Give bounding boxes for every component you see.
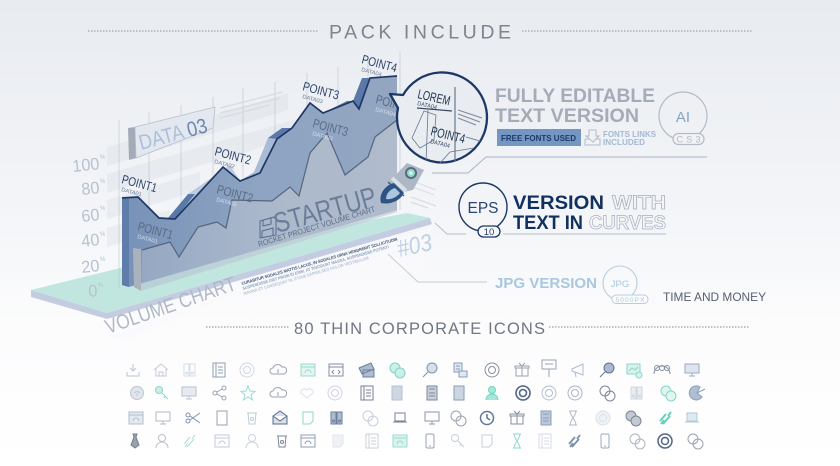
icon: scissors xyxy=(186,413,200,423)
icon: star xyxy=(241,386,255,400)
point labels, main line: DATA02 xyxy=(213,159,235,170)
icon: basket hand xyxy=(486,386,498,400)
icon: pie target xyxy=(689,386,705,400)
magnified chart detail: DATA04 xyxy=(430,139,451,150)
text block: jpg version: JPG VERSION xyxy=(495,276,597,292)
icon grid xyxy=(127,360,705,449)
badge: JPG 5000PX xyxy=(603,266,648,304)
icon: hand gears xyxy=(626,411,641,426)
point labels, main line: POINT4 xyxy=(360,52,399,75)
icon: coffee cup xyxy=(277,436,287,447)
icon: search xyxy=(423,363,437,377)
icon: building xyxy=(454,363,467,377)
startup heading: ROCKET PROJECT VOLUME CHART xyxy=(257,205,376,249)
main data line xyxy=(122,76,397,219)
icon: globe xyxy=(240,363,254,377)
icon: key xyxy=(156,386,168,399)
icon: teal chat xyxy=(661,386,676,401)
text block: fully editable: FULLY EDITABLE xyxy=(495,86,655,107)
icon: server xyxy=(361,386,373,400)
icon: fonts download xyxy=(585,130,600,145)
y axis labels: 40 xyxy=(80,230,100,251)
icon: download xyxy=(127,364,139,376)
icon: dollar xyxy=(568,386,582,400)
lower plane xyxy=(108,226,432,340)
y axis labels: 80 xyxy=(80,178,100,199)
icon: settings xyxy=(688,434,703,449)
side notes xyxy=(411,182,436,208)
point labels, main line: POINT1 xyxy=(120,172,159,195)
left bar xyxy=(122,197,129,287)
y axis labels: 100 xyxy=(71,154,100,176)
icon: smartphone xyxy=(426,434,434,448)
icon: presentation xyxy=(182,387,196,399)
icon: sale xyxy=(542,360,556,377)
front data line xyxy=(142,120,397,257)
icon: phone circle xyxy=(485,363,499,377)
icon: eye xyxy=(596,411,610,425)
badge: free fonts used: FREE FONTS USED xyxy=(501,133,576,143)
badge: EPS 10 xyxy=(459,183,507,238)
icon: code xyxy=(329,364,343,376)
point labels, front line: POINT2 xyxy=(215,182,255,205)
icon: papers xyxy=(333,435,343,447)
startup heading xyxy=(257,181,380,249)
y axis labels: % xyxy=(100,155,106,161)
icon: tablet pie xyxy=(392,386,402,400)
icon: lifebuoy xyxy=(328,386,342,400)
icon: rocket pen xyxy=(660,412,671,424)
fonts links text: INCLUDED xyxy=(603,137,645,147)
point labels, front line: DATA01 xyxy=(136,234,158,245)
icon: bars xyxy=(631,387,642,399)
text block: version with text in curves: WITH xyxy=(612,193,666,214)
icon: monitor xyxy=(685,364,699,376)
magnified chart detail: DATA04 xyxy=(417,101,438,112)
icon: wifi xyxy=(130,386,144,400)
data 03 frame: DATA 03 xyxy=(136,114,210,155)
icon: compass xyxy=(569,411,577,425)
point labels, front line: POINT3 xyxy=(311,116,350,139)
icon: mail xyxy=(273,411,287,424)
heading: thin corporate icons: 80 THIN CORPORATE ICONS xyxy=(294,320,545,338)
icon: chat mobile xyxy=(630,434,645,449)
y axis labels: % xyxy=(98,283,104,289)
icon: note xyxy=(303,412,313,424)
icon: at sign xyxy=(542,386,556,400)
icon: gears xyxy=(390,363,405,378)
icon: contact xyxy=(454,386,464,400)
point labels, main line: DATA04 xyxy=(360,67,382,78)
icon: calculator xyxy=(427,386,437,400)
text block: version with text in curves: VERSION xyxy=(513,193,604,214)
icon: thumbs up xyxy=(516,386,530,400)
icon: printer xyxy=(129,412,143,424)
y axis labels: % xyxy=(100,257,106,263)
connector lines xyxy=(388,157,707,282)
point labels, front line: DATA04 xyxy=(374,107,396,118)
icon: tie user xyxy=(131,434,139,448)
icon: folders xyxy=(331,412,342,424)
icon: gear chain xyxy=(363,411,378,426)
magnified chart detail: POINT4 xyxy=(429,123,467,146)
icon: heart xyxy=(301,389,313,398)
badge: EPS 10: EPS xyxy=(468,200,498,217)
icon: user xyxy=(156,434,168,448)
caption: time and money: TIME AND MONEY xyxy=(663,290,766,304)
startup heading: STARTUP xyxy=(270,181,380,239)
point labels, main line: DATA01 xyxy=(120,187,142,198)
icon: network xyxy=(685,413,699,422)
point labels, main line: POINT3 xyxy=(301,79,341,102)
badge: AI CS3 xyxy=(659,92,707,144)
y axis labels xyxy=(71,154,106,301)
icon: basket xyxy=(184,364,195,376)
magnified chart detail xyxy=(412,86,482,163)
text block: fully editable xyxy=(495,86,656,147)
small paragraph: SUSPENDISSE DIET PROIN ID ERIM, AT TINCIDUNT MAGNA, SUSPENDISSE POTENTI xyxy=(242,244,389,291)
icon: share xyxy=(213,386,226,400)
icon: paperclip xyxy=(184,435,195,447)
icon: wrench xyxy=(452,434,464,447)
point labels, front line: DATA02 xyxy=(215,197,237,208)
badge: EPS 10: 10 xyxy=(484,227,494,238)
small paragraph: MAGNA ET CONSEQUAT IN, ETIAM SAPIEN SED DOLOR VESTIBULUM xyxy=(243,255,370,296)
icon: people xyxy=(654,366,670,374)
badge: AI CS3: AI xyxy=(676,109,690,126)
point labels, front line xyxy=(136,92,413,245)
badge: free fonts used xyxy=(497,129,581,146)
point labels, front line: POINT1 xyxy=(136,219,175,242)
icon: window xyxy=(301,364,315,376)
callout: magnifier xyxy=(390,72,487,163)
badge: JPG 5000PX: JPG xyxy=(611,279,629,290)
text block: fully editable: TEXT VERSION xyxy=(495,106,639,127)
point labels, main line xyxy=(120,52,399,198)
y axis labels: % xyxy=(100,206,106,212)
icon: laptop xyxy=(393,413,407,422)
icon: hourglass xyxy=(513,434,521,448)
point labels, front line: DATA03 xyxy=(311,131,333,142)
icon: cloud xyxy=(270,365,287,374)
icon: gift xyxy=(515,363,529,376)
y axis labels: % xyxy=(100,179,106,185)
icon: teal printer xyxy=(393,435,407,447)
icon: megaphone xyxy=(572,364,583,377)
icon: mail fly xyxy=(215,435,229,447)
point labels, main line: POINT2 xyxy=(213,144,253,167)
main area xyxy=(122,76,397,287)
icon: sign xyxy=(539,434,551,448)
icon: floppy disk xyxy=(260,217,276,238)
point labels, main line: DATA03 xyxy=(301,94,323,105)
icon: home xyxy=(154,364,168,376)
icon: people search xyxy=(600,386,615,401)
ridge behind line xyxy=(168,78,370,219)
front left bar xyxy=(133,248,141,291)
point labels, front line: POINT4 xyxy=(374,92,413,115)
fonts links text: FONTS LINKS xyxy=(603,129,656,139)
icon: search data xyxy=(600,363,614,377)
front area xyxy=(141,120,397,291)
icon: coffee xyxy=(247,413,257,424)
y axis labels: 0 xyxy=(87,281,98,301)
icon: mobile chat xyxy=(601,434,609,448)
y axis labels: 60 xyxy=(80,205,100,226)
badge: JPG 5000PX: 5000PX xyxy=(616,297,645,304)
icon: id card xyxy=(301,435,315,447)
y axis labels: 20 xyxy=(80,256,100,277)
fonts links text xyxy=(603,129,656,147)
platform xyxy=(31,213,432,319)
horizontal shadow bands xyxy=(107,93,300,247)
icon: presentation chart xyxy=(425,412,439,424)
vertical grid lines xyxy=(119,52,400,288)
icon: display xyxy=(156,412,170,424)
icon: cards xyxy=(359,363,374,377)
icon: woman xyxy=(246,434,258,448)
panel: 3D volume chart xyxy=(31,52,436,340)
icon: cloud lock xyxy=(270,388,287,397)
icon: phone book xyxy=(366,434,378,448)
icon: bug gear xyxy=(451,411,466,426)
icon: clock xyxy=(480,412,494,424)
text block: version with text in curves xyxy=(513,193,666,234)
icon: rocket xyxy=(380,163,424,204)
icon: clip xyxy=(569,435,580,447)
icon: chart xyxy=(627,364,642,378)
icon: tablet xyxy=(217,411,227,425)
small paragraph: CURABITUR SODALES MATTIS LACUS, IN SODALES URNA HENDRERIT SOLLICITUDIN xyxy=(241,237,398,286)
y axis labels: % xyxy=(100,232,106,238)
icon: calculator xyxy=(541,411,551,425)
icon: refresh chat xyxy=(658,434,672,448)
number 03: #03 xyxy=(395,229,435,263)
text block: version with text in curves: CURVES xyxy=(589,213,666,234)
icon: book xyxy=(213,363,225,377)
badge: AI CS3: CS3 xyxy=(676,134,700,144)
magnified chart detail: LOREM xyxy=(416,86,452,108)
icon: briefcase xyxy=(510,411,524,424)
data 03 frame xyxy=(128,92,283,160)
volume chart label: VOLUME CHART xyxy=(102,272,240,339)
text block: version with text in curves: TEXT IN xyxy=(513,213,583,234)
icon: document xyxy=(482,435,492,447)
title: pack include: PACK INCLUDE xyxy=(329,22,511,44)
